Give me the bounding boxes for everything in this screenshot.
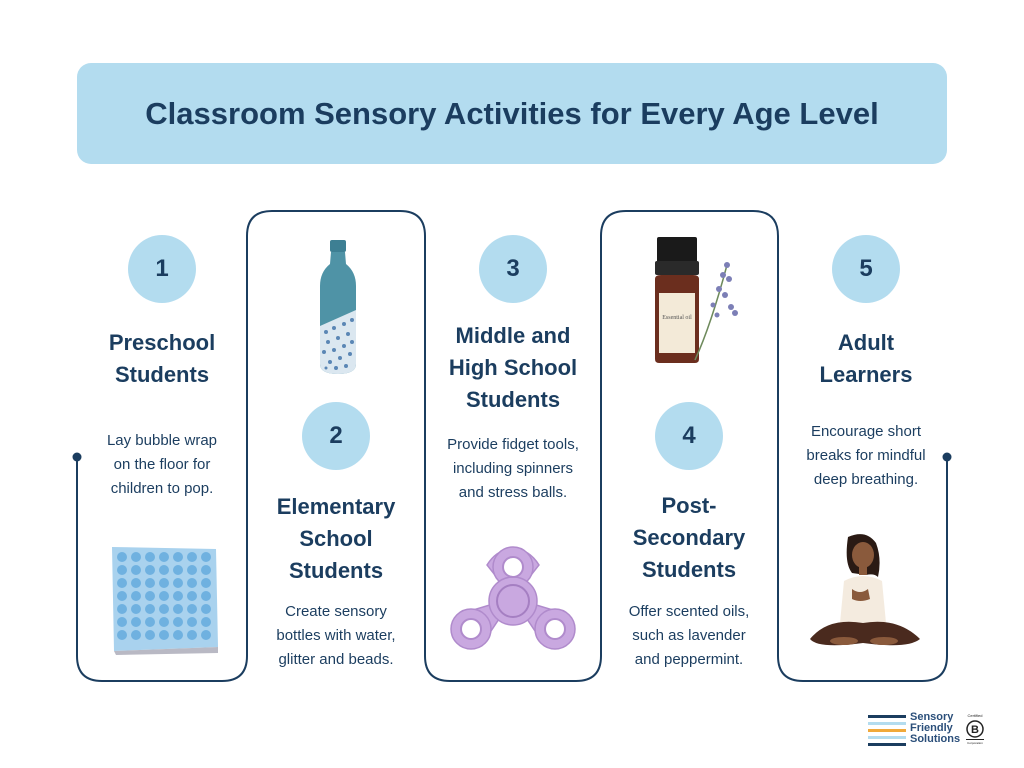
heading 2: Students [289, 558, 383, 583]
column 3 [447, 235, 579, 650]
heading 3 [449, 323, 577, 412]
text 4: and peppermint. [635, 651, 743, 668]
heading 4: Secondary [633, 525, 745, 550]
heading 2: Elementary [277, 494, 395, 519]
text 5: Encourage short [811, 423, 921, 440]
text 3: and stress balls. [459, 484, 567, 501]
text 1 [107, 432, 217, 497]
text 4: such as lavender [632, 627, 746, 644]
text 1: Lay bubble wrap [107, 432, 217, 449]
heading 2: School [299, 526, 373, 551]
icon: sensory bottle [320, 240, 356, 374]
heading 5: Learners [820, 362, 912, 387]
text 4: Offer scented oils, [629, 603, 749, 620]
heading 4: Students [642, 557, 736, 582]
number 1: 1 [155, 255, 169, 282]
heading 1: Students [115, 362, 209, 387]
text 4 [629, 603, 749, 668]
text 3 [447, 436, 579, 501]
text 2: glitter and beads. [278, 651, 394, 668]
heading 3: High School [449, 355, 577, 380]
icon: meditating person [810, 534, 920, 646]
logo: Sensory Friendly Solutions: Friendly [910, 722, 953, 734]
heading 5: Adult [838, 330, 894, 355]
number 4: 4 [682, 422, 696, 449]
column 2 [276, 240, 396, 668]
logo: Sensory Friendly Solutions: Sensory [910, 711, 953, 723]
logo: Sensory Friendly Solutions: Solutions [910, 733, 960, 745]
title: Classroom Sensory Activities for Every Age Level [145, 96, 879, 130]
heading 2 [277, 494, 396, 583]
heading 4 [633, 493, 746, 582]
number 5: 5 [859, 255, 873, 282]
number 2: 2 [329, 422, 343, 449]
text 2: Create sensory [285, 603, 387, 620]
text 5: deep breathing. [814, 471, 918, 488]
heading 5 [820, 330, 912, 387]
text 2 [276, 603, 396, 668]
icon: B certified: Certified [968, 713, 982, 718]
icon: B certified: B [971, 724, 979, 736]
text 5 [806, 423, 926, 488]
column 5 [806, 235, 926, 646]
heading 3: Middle and [456, 323, 570, 348]
text 3: including spinners [453, 460, 573, 477]
number 1 [128, 235, 196, 303]
heading 3: Students [466, 387, 560, 412]
number 3: 3 [506, 255, 520, 282]
icon: B certified [966, 713, 984, 745]
number 3 [479, 235, 547, 303]
number 5 [832, 235, 900, 303]
icon: essential oil bottle [655, 237, 738, 363]
text 5: breaks for mindful [806, 447, 926, 464]
logo: Sensory Friendly Solutions [868, 711, 984, 746]
title [77, 63, 947, 164]
icon: B certified: Corporation [967, 741, 983, 745]
number 2 [302, 402, 370, 470]
number 4 [655, 402, 723, 470]
heading 1: Preschool [109, 330, 215, 355]
text 3: Provide fidget tools, [447, 436, 579, 453]
icon: essential oil bottle: Essential oil [662, 315, 692, 321]
column 4 [629, 237, 749, 668]
text 1: children to pop. [111, 480, 213, 497]
column 1 [107, 235, 218, 655]
heading 4: Post- [662, 493, 716, 518]
heading 1 [109, 330, 215, 387]
icon: fidget spinner [450, 546, 576, 650]
text 2: bottles with water, [276, 627, 396, 644]
text 1: on the floor for [114, 456, 210, 473]
icon: bubble wrap [112, 547, 218, 655]
